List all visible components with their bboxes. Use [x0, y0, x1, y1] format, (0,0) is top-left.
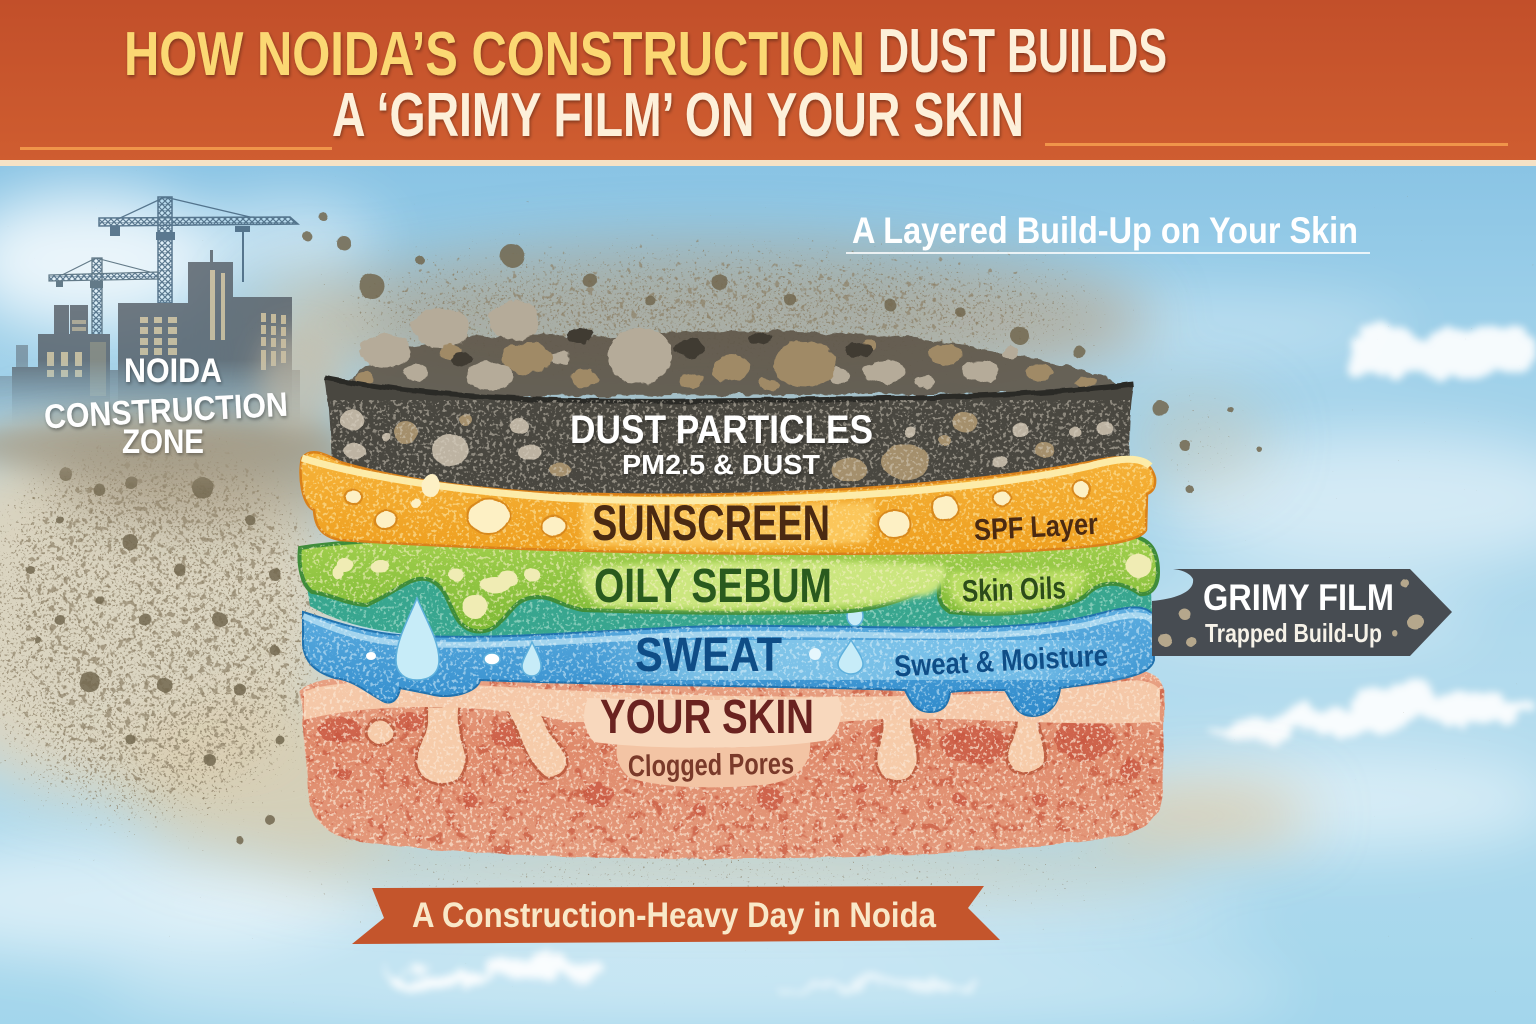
header band: [0, 0, 1536, 166]
arrow: grimy film callout: [1152, 569, 1452, 656]
label: sweat: [635, 629, 1109, 684]
sebum blobs: [332, 554, 1151, 619]
sunscreen label highlight: [582, 500, 875, 548]
arrow: grimy film callout: GRIMY FILM: [1203, 577, 1394, 618]
title: HOW NOIDA’S CONSTRUCTION: [124, 20, 865, 89]
clogged pores: [366, 705, 1046, 785]
sweat drops: [366, 598, 863, 680]
banner: [352, 886, 1000, 944]
sweat label highlight: [600, 640, 1140, 680]
layer: your skin: [300, 671, 1164, 859]
label: oily sebum: OILY SEBUM: [594, 560, 832, 613]
crane: large tower crane: [99, 197, 298, 303]
banner: A Construction-Heavy Day in Noida: [412, 896, 936, 935]
label: Noida construction zone: CONSTRUCTION: [43, 386, 289, 436]
layer: oily sebum: [300, 532, 1158, 632]
skyline haze: [0, 330, 340, 475]
label: sunscreen: SUNSCREEN: [592, 495, 830, 551]
label: Noida construction zone: ZONE: [122, 423, 204, 461]
layer: teal water: [306, 570, 1152, 637]
label: dust particles: [570, 408, 873, 480]
label: sunscreen: [592, 495, 1099, 551]
layer: sweat: [303, 598, 1154, 716]
subheading: A Layered Build-Up on Your Skin: [852, 210, 1358, 251]
buildings: [0, 250, 300, 425]
arrow: grimy film callout: Trapped Build-Up: [1205, 618, 1382, 648]
dust grains: [340, 409, 1113, 482]
title: DUST BUILDS: [878, 17, 1167, 86]
label: your skin: Clogged Pores: [628, 748, 794, 783]
label: oily sebum: [594, 560, 1067, 613]
layer: sunscreen: [300, 452, 1155, 554]
label: sweat: SWEAT: [635, 629, 782, 682]
crane: small tower crane: [49, 258, 158, 336]
label: sunscreen: SPF Layer: [973, 508, 1099, 547]
label: dust particles: DUST PARTICLES: [570, 408, 873, 452]
dust haze cloud: [0, 245, 1310, 896]
label: Noida construction zone: NOIDA: [124, 352, 222, 390]
label: sweat: Sweat & Moisture: [893, 639, 1109, 684]
label: dust particles: PM2.5 & DUST: [622, 449, 820, 480]
title: A ‘GRIMY FILM’ ON YOUR SKIN: [332, 81, 1024, 150]
lit windows: [47, 270, 286, 377]
label: Noida construction zone: [43, 352, 289, 461]
layer: dust particles: [325, 378, 1134, 505]
skin mottling: [316, 712, 1140, 816]
sunscreen droplets: [344, 474, 1091, 538]
title: [124, 17, 1167, 150]
dust specks: [26, 213, 1263, 844]
sebum label highlight: [581, 561, 946, 610]
grime spots: [1158, 579, 1424, 647]
construction skyline: [0, 197, 300, 425]
layer: rubble on top of dust: [345, 300, 1130, 398]
label: your skin: YOUR SKIN: [600, 691, 814, 744]
label: oily sebum: Skin Oils: [961, 570, 1067, 609]
puffy clouds: [380, 326, 1536, 990]
label: your skin: [584, 691, 841, 787]
